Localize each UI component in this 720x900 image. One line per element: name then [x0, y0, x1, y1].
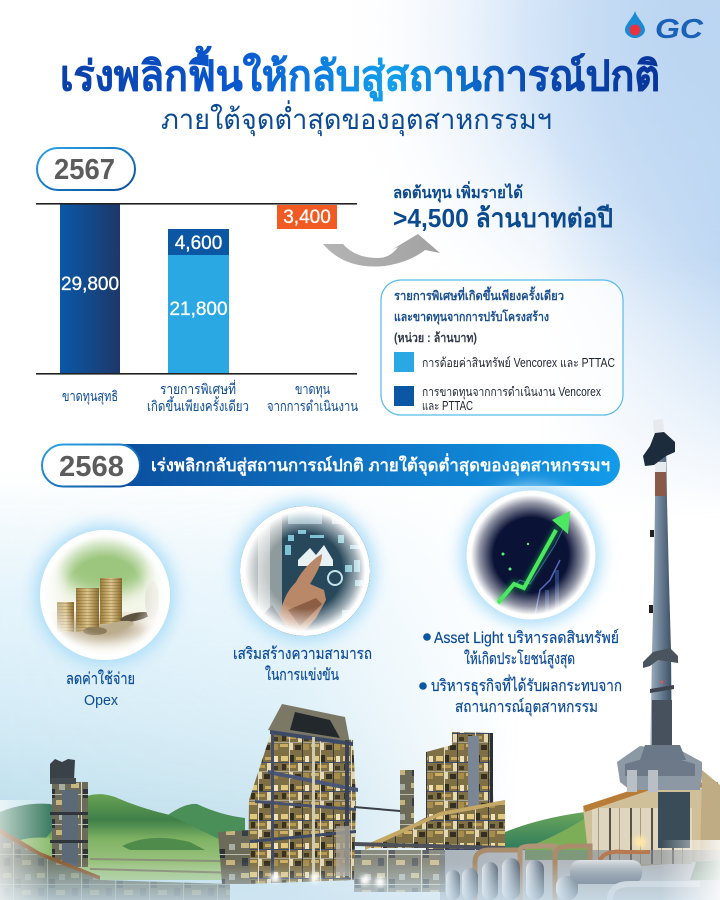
bar chart: [36, 203, 358, 414]
refinery: central tower: [218, 704, 358, 884]
hills: [0, 794, 720, 880]
label: net loss: ขาดทุนสุทธิ: [62, 388, 118, 405]
callout: savings target: [393, 181, 613, 233]
banner 2568: 2568: [59, 451, 124, 483]
label: one-time items: รายการพิเศษที่: [160, 380, 236, 397]
refinery: right tower and rack: [354, 732, 505, 892]
year pill 2567: [37, 148, 135, 190]
legend title: [394, 286, 564, 345]
caption: asset light and business management: ให้เกิดประโยชน์สูงสุด: [464, 649, 575, 669]
arrow: curved grey: [323, 234, 440, 267]
chimney stack: [643, 419, 678, 770]
refinery: left column: [50, 759, 88, 867]
callout: savings target: ลดต้นทุน เพิ่มรายได้: [393, 181, 523, 203]
bar: one-time items: 21,800: [169, 299, 228, 320]
legend item: operating loss: [394, 385, 602, 413]
label: operating loss: [267, 381, 358, 414]
bar: one-time items: 4,600: [175, 233, 222, 254]
refinery: left pipe rack: [0, 828, 240, 900]
logo: GC: GC: [655, 13, 704, 44]
photo: hand and data: [235, 501, 375, 641]
caption: reduce opex: Opex: [84, 692, 118, 709]
legend title: รายการพิเศษที่เกิดขึ้นเพียงครั้งเดียว: [394, 286, 564, 303]
legend title: และขาดทุนจากการปรับโครงสร้าง: [394, 309, 549, 325]
title: เร่งพลิกฟื้นให้กลับสู่สถานการณ์ปกติ: [60, 46, 660, 102]
caption: competitiveness: ในการแข่งขัน: [265, 665, 339, 684]
bar: operating loss: 3,400: [283, 207, 331, 228]
growth line: [498, 511, 570, 603]
legend item: impairment: [394, 352, 615, 372]
logo: GC: [625, 11, 704, 44]
label: operating loss: ขาดทุน: [295, 381, 330, 398]
label: one-time items: [147, 380, 249, 414]
refinery: right building: [583, 745, 720, 870]
callout: savings target: >4,500 ล้านบาทต่อปี: [393, 203, 613, 233]
ground haze: [0, 800, 720, 900]
caption: asset light and business management: [419, 628, 622, 717]
banner 2568: [42, 444, 620, 486]
caption: asset light and business management: Asset Light บริหารลดสินทรัพย์: [434, 628, 619, 647]
legend item: operating loss: และ PTTAC: [422, 399, 473, 413]
label: one-time items: เกิดขึ้นเพียงครั้งเดียว: [147, 396, 249, 414]
banner 2568: เร่งพลิกกลับสู่สถานการณ์ปกติ ภายใต้จุดต่ำสุดของอุตสาหกรรมฯ: [151, 453, 610, 477]
refinery: foreground pipes: [440, 836, 720, 900]
caption: reduce opex: ลดค่าใช้จ่าย: [66, 669, 135, 688]
legend item: operating loss: การขาดทุนจากการดำเนินงาน Vencorex: [422, 385, 602, 400]
caption: reduce opex: [66, 669, 135, 709]
label: operating loss: จากการดำเนินงาน: [267, 398, 358, 414]
subtitle: ภายใต้จุดต่ำสุดของอุตสาหกรรมฯ: [161, 100, 552, 137]
legend panel: [381, 280, 623, 415]
caption: competitiveness: [233, 645, 372, 684]
caption: competitiveness: เสริมสร้างความสามารถ: [233, 645, 372, 663]
legend title: (หน่วย : ล้านบาท): [394, 331, 477, 345]
caption: asset light and business management: สถานการณ์อุตสาหกรรม: [455, 697, 598, 717]
photo: coins: [35, 525, 175, 665]
legend item: impairment: การด้อยค่าสินทรัพย์ Vencorex และ PTTAC: [422, 356, 615, 370]
bar: net loss: [60, 204, 120, 374]
caption: asset light and business management: บริหารธุรกิจที่ได้รับผลกระทบจาก: [431, 674, 622, 696]
photo: growth arrow: [461, 485, 601, 625]
year pill 2567: 2567: [54, 154, 115, 186]
bar: net loss: 29,800: [61, 274, 119, 295]
bar: one-time items: [168, 229, 229, 374]
bar: operating loss: [277, 205, 337, 229]
